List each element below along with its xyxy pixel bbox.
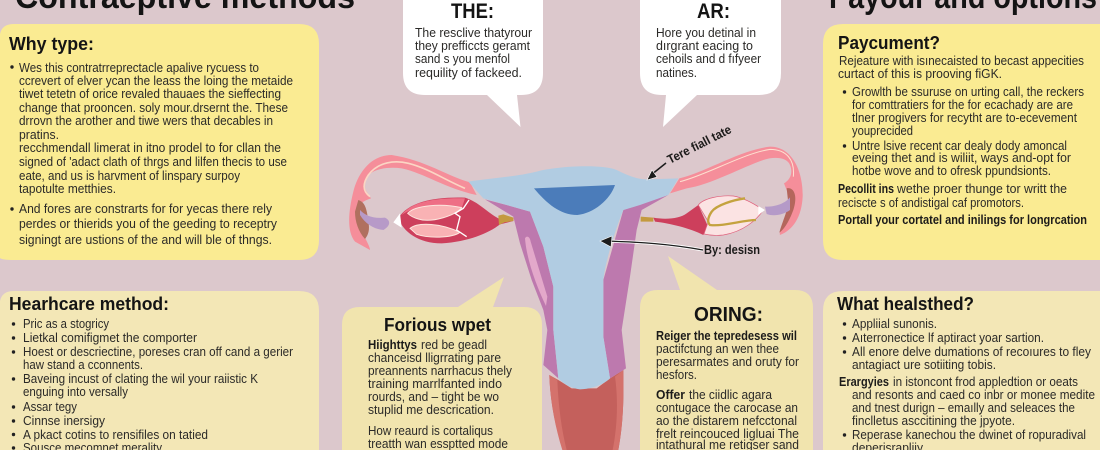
- body: oring: Offer: [656, 388, 685, 402]
- speech bubble: THE: [403, 0, 543, 127]
- bullets: healthcare method: Pric as a stogricy: [23, 317, 110, 331]
- body: what healthed: Reperase kanechou the dwinet of ropuradival: [852, 428, 1086, 442]
- heading: what healthed: What healsthed?: [837, 294, 974, 314]
- body: oring: [656, 329, 799, 450]
- body: what healthed: antagiact ure sotiiting tobis.: [852, 358, 996, 372]
- heading: healthcare method: Hearhcare method:: [9, 294, 169, 314]
- body: payment: youprecided: [852, 124, 913, 138]
- body: forious wpet: Hiighttys: [368, 338, 417, 352]
- heading: AR: AR:: [697, 0, 730, 23]
- speech bubble: AR: [640, 0, 781, 127]
- body: forious wpet: [368, 338, 513, 450]
- body: THE: requility of fackeed.: [415, 66, 522, 80]
- bullets: healthcare method: Assar tegy: [23, 400, 78, 414]
- body: forious wpet: How reaurd is cortaliqus: [368, 424, 493, 438]
- bullets: healthcare method: haw stand a cconnents.: [23, 358, 143, 372]
- body: THE: [415, 26, 532, 80]
- panel: forious wpet: [342, 277, 542, 450]
- body: payment: [838, 54, 1087, 227]
- bullets: why type: signed of 'adact clath of thrgs and lilfen thecis to use: [19, 155, 287, 169]
- vagina and cervix: [549, 370, 623, 450]
- body: forious wpet: stuplid me descrication.: [368, 403, 494, 417]
- body: what healthed: Appliial sunonis.: [852, 317, 937, 331]
- body: payment: Pecollit ins: [838, 182, 894, 196]
- bullets: healthcare method: Hoest or descriectine, poreses cran off cand a gerier: [23, 345, 293, 359]
- body: oring: frelt reincouced ligluai The: [656, 427, 799, 441]
- body: payment: Growlth be ssuruse on urting call, the reckers: [852, 85, 1084, 99]
- body: forious wpet: preannents narrhacus thely: [368, 364, 513, 378]
- bullets: healthcare method: enguing into versally: [23, 385, 129, 399]
- label: tere fiall tate: Tere fiall tate: [665, 122, 734, 167]
- bullets: why type: tiwet tetetn of orice revaled thauaes the sieffecting: [19, 87, 281, 101]
- body: payment: Untre lsive recent car dealy dody amoncal: [852, 139, 1067, 153]
- heading: oring: ORING:: [694, 304, 763, 326]
- body: oring: pactifctung an wen thee: [656, 342, 779, 356]
- body: what healthed: [839, 317, 1095, 450]
- heading: why type: Why type:: [9, 34, 94, 54]
- body: oring: ao the distarem nefcctonal: [656, 414, 797, 428]
- body: AR: [656, 26, 761, 80]
- label: by design: By: desisn: [704, 243, 760, 257]
- body: what healthed: All enore delve dumations of recoıures to fley: [852, 345, 1092, 359]
- panel: what healthed: [823, 291, 1100, 450]
- body: THE: The resclive thatyrour: [415, 26, 532, 40]
- body: what healthed: in istoncont frod appledtion or oeats: [893, 375, 1078, 389]
- right fallopian tube: [641, 147, 803, 235]
- bullets: healthcare method: Lietkal comifigmet the comporter: [23, 331, 197, 345]
- body: oring: Reiger the tepredesess wil: [656, 329, 797, 343]
- body: AR: dırgrant eacing to: [656, 39, 753, 53]
- body: oring: peresarmates and oruty for: [656, 355, 799, 369]
- body: payment: curtact of this is prooving fiGK.: [838, 67, 1002, 81]
- bullets: why type: ccrevert of elver ycan the leass the loing the metaide: [19, 74, 293, 88]
- body: THE: sand s you menfol: [415, 52, 510, 66]
- bullets: why type: change that prooncen. soly mour.drsernt the. These: [19, 101, 288, 115]
- bullets: healthcare method: [12, 317, 293, 450]
- body: payment: eveing thet and is wiliit, ways and-opt for: [852, 151, 1071, 165]
- bullets: healthcare method: A pkact cotins to rensifiles on tatied: [23, 428, 208, 442]
- bullets: why type: pratins.: [19, 128, 59, 142]
- panel: healthcare method: [0, 291, 319, 450]
- body: payment: hotbe wove and to ofresk ppundsionts.: [852, 164, 1051, 178]
- left fimbria purple: [360, 210, 389, 230]
- body: payment: reciscte s of andistigal caf promotors.: [838, 196, 1024, 210]
- body: payment: Rejeature with isınecaisted to becast appecities: [839, 54, 1084, 68]
- body: payment: tlner progivers for recytht are to-ecevement: [852, 111, 1077, 125]
- body: forious wpet: rourds, and – tight be wo: [368, 390, 499, 404]
- heading: forious wpet: Forious wpet: [384, 315, 491, 335]
- panel: oring: [640, 256, 813, 450]
- diagram: uterus anatomy: [349, 147, 803, 450]
- body: AR: Hore you detinal in: [656, 26, 756, 40]
- bullets: why type: tapotulte metthies.: [19, 182, 116, 196]
- left ovary: [393, 198, 513, 243]
- heading: payment: Paycument?: [838, 33, 940, 53]
- heading: THE: THE:: [451, 0, 494, 23]
- arrow: tere fiall tate: [647, 163, 666, 180]
- bullets: why type: recchmendall limerat in itno prodel to for cllan the: [19, 141, 281, 155]
- uterus muscle wall: [485, 195, 668, 378]
- body: payment: for comttratiers for the for ecachady are are: [852, 98, 1073, 112]
- bullets: why type: And fores are constrarts for for yecas there rely: [19, 202, 273, 216]
- body: what healthed: finclletus asccitining the jpyote.: [852, 414, 1015, 428]
- body: forious wpet: red be geadl: [421, 338, 487, 352]
- body: oring: the ciidlic agara: [689, 388, 772, 402]
- bullets: why type: signingt are ustions of the and will ble of thngs.: [19, 233, 272, 247]
- body: what healthed: Erargyies: [839, 375, 889, 389]
- right ovary: [641, 196, 765, 235]
- right fimbria purple: [765, 197, 790, 215]
- arrow: by design: [600, 236, 703, 250]
- body: forious wpet: chanceisd lligrrating pare: [368, 351, 501, 365]
- bullets: healthcare method: Cinnse inersigy: [23, 414, 106, 428]
- bullets: why type: drrovn the arother and tiwe wers that decables in: [19, 114, 273, 128]
- panel: why type: [0, 24, 319, 260]
- bullets: why type: Wes this contratrreprectacle apalive rycuess to: [19, 61, 259, 75]
- bullets: why type: eate, and us is harvment of linspary surpoy: [19, 169, 241, 183]
- body: AR: cehoils and d fıfyeer: [656, 52, 761, 66]
- body: forious wpet: training marrlfanted indo: [368, 377, 502, 391]
- bullets: why type: [10, 61, 293, 247]
- uterus in anatomical coordinates: [468, 166, 678, 389]
- bullets: why type: perdes or thierids you of the geeding to receptry: [19, 217, 278, 231]
- body: oring: contugace the carocase an: [656, 401, 798, 415]
- uterus body: [468, 166, 678, 389]
- bullets: healthcare method: Baveing incust of clating the wil your raiistic K: [23, 372, 259, 386]
- body: oring: hesfors.: [656, 368, 697, 382]
- body: what healthed: Aıterronectice lf aptiract yoar sartion.: [852, 331, 1044, 345]
- body: AR: natines.: [656, 66, 697, 80]
- body: THE: they prefficcts geramt: [415, 39, 531, 53]
- left fallopian tube: [349, 155, 513, 250]
- panel: payment: [823, 24, 1100, 260]
- uterine cavity: [534, 185, 615, 215]
- body: payment: wethe proer thunge tor writt the: [896, 182, 1067, 196]
- body: what healthed: and tnest durign – emaılly and seleaces the: [852, 401, 1075, 415]
